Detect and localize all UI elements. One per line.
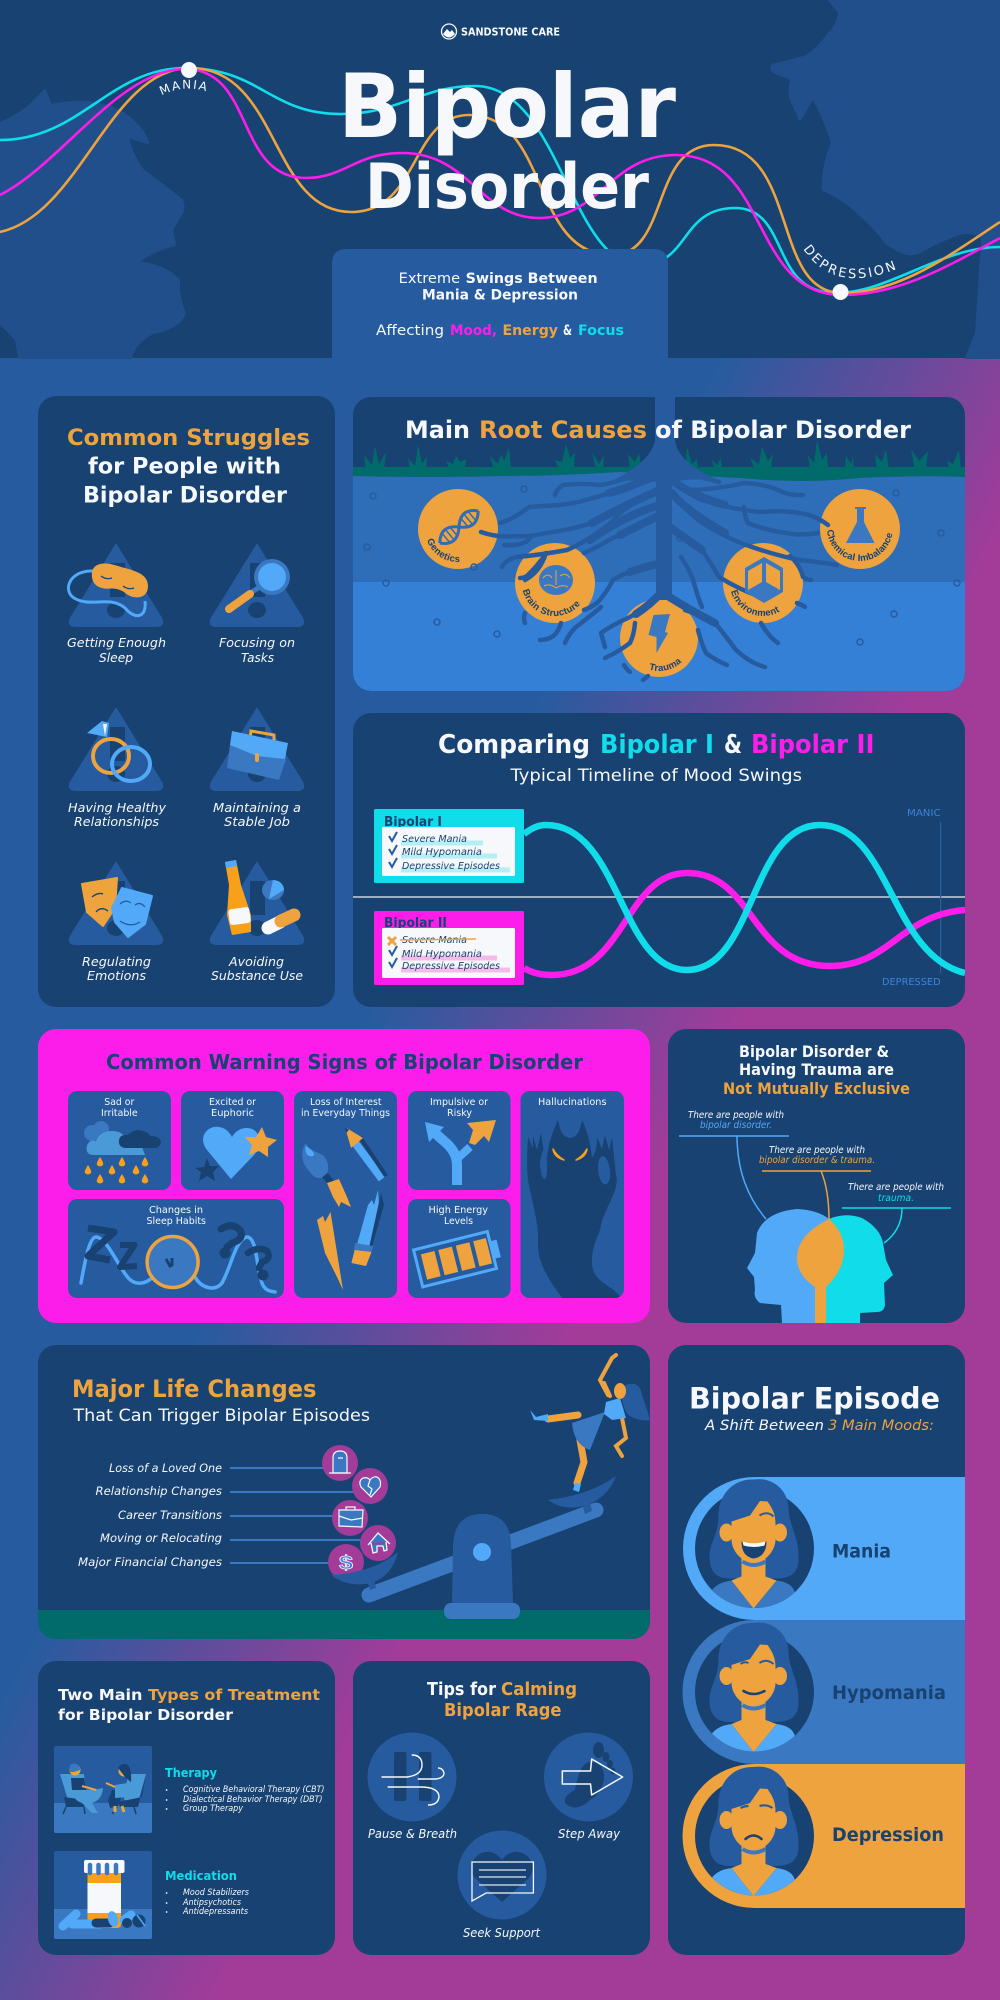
label: avoiding substance use: Avoiding xyxy=(228,955,284,969)
icon: tombstone xyxy=(322,1445,358,1481)
legend card: bipolar I: Depressive Episodes xyxy=(402,861,500,872)
label: maintaining a stable job xyxy=(213,801,301,829)
depression marker xyxy=(804,244,896,300)
illustration: medication bottle xyxy=(54,1851,152,1939)
heading: bipolar episode xyxy=(689,1382,940,1434)
subtitle box: Affecting xyxy=(376,323,444,339)
text: therapy: Cognitive Behavioral Therapy (CBT) xyxy=(183,1785,324,1795)
icon: theatre masks xyxy=(70,863,162,944)
illustration: woman on seesaw xyxy=(530,1355,650,1492)
callout: bipolar disorder: There are people with xyxy=(688,1110,784,1121)
legend card: bipolar I xyxy=(374,809,524,883)
panel: warning signs xyxy=(38,1029,650,1323)
soil pebbles xyxy=(364,486,960,645)
card: changes in sleep habits xyxy=(68,1199,284,1298)
heading: not mutually exclusive: Not Mutually Exclusive xyxy=(723,1079,910,1098)
heading: comparing: Bipolar I xyxy=(600,730,714,760)
panel: calming tips xyxy=(353,1661,650,1955)
card: high energy levels: High Energy xyxy=(428,1205,488,1216)
label: step away: Step Away xyxy=(558,1826,621,1841)
card: changes in sleep habits: Changes in xyxy=(149,1205,203,1216)
panel: major life changes xyxy=(38,1345,650,1639)
icon: seek support xyxy=(458,1830,546,1920)
callout: trauma: trauma. xyxy=(878,1193,914,1204)
label: avoiding substance use xyxy=(211,955,303,983)
label: getting enough sleep: Getting Enough xyxy=(67,636,166,650)
subtitle box xyxy=(332,249,668,358)
label: maintaining a stable job: Stable Job xyxy=(224,815,290,829)
heading: common struggles: Common Struggles xyxy=(67,426,310,451)
icon: brain and brain structure label: Brain Structure xyxy=(522,588,580,616)
list of life changes: Career Transitions xyxy=(118,1508,222,1522)
list of life changes: Relationship Changes xyxy=(96,1484,222,1498)
heading: treatment: Types of Treatment xyxy=(148,1686,321,1704)
heading: major life changes: That Can Trigger Bipolar Episodes xyxy=(72,1406,370,1426)
heading: common struggles: for People with xyxy=(88,454,281,480)
midline and scale: DEPRESSED xyxy=(882,977,941,988)
heading: treatment: for Bipolar Disorder xyxy=(58,1706,233,1724)
callout: bipolar disorder: bipolar disorder. xyxy=(700,1120,772,1131)
label: regulating emotions: Regulating xyxy=(82,955,151,969)
heading: comparing: Typical Timeline of Mood Swings xyxy=(509,766,802,786)
callout: bipolar disorder and trauma: There are people with xyxy=(769,1145,865,1156)
icon: dollar xyxy=(328,1544,364,1580)
legend card: bipolar I: Severe Mania xyxy=(402,834,467,845)
heading: root causes xyxy=(405,416,911,444)
mania marker: MANIA xyxy=(159,80,206,95)
icon: flask and chemical imbalance label xyxy=(827,507,892,562)
legend card: bipolar II: Bipolar II xyxy=(384,915,447,931)
callout: bipolar disorder xyxy=(679,1110,789,1219)
text: medication: Antipsychotics xyxy=(182,1898,242,1908)
label: seek support: Seek Support xyxy=(463,1925,541,1940)
icon: bottle and pills xyxy=(211,860,303,944)
label: avoiding substance use: Substance Use xyxy=(211,969,303,983)
text: therapy: Dialectical Behavior Therapy (DBT) xyxy=(183,1795,322,1805)
label: having healthy relationships: Having Healthy xyxy=(68,801,167,815)
band: hypomania xyxy=(682,1620,965,1764)
legend card: bipolar II xyxy=(374,911,524,985)
heading: warning signs: Common Warning Signs of Bipolar Disorder xyxy=(106,1050,583,1074)
text: medication: Antidepressants xyxy=(182,1907,249,1917)
title xyxy=(338,55,677,223)
heading: comparing: Bipolar II xyxy=(751,730,874,760)
label: focusing on tasks: Tasks xyxy=(241,651,274,665)
icon: lightning and trauma label: Trauma xyxy=(650,659,682,672)
panel: root causes xyxy=(353,397,965,691)
subtitle box: & xyxy=(563,323,572,339)
icon: lightning and trauma label xyxy=(648,614,682,672)
heading: major life changes: Major Life Changes xyxy=(72,1375,316,1403)
heading: bipolar episode: 3 Main Moods: xyxy=(828,1418,934,1434)
legend card: bipolar II: Mild Hypomania xyxy=(402,949,482,960)
icon: magnifying glass xyxy=(211,545,303,626)
heading: calming tips: Calming xyxy=(501,1680,577,1700)
heading: comparing: & xyxy=(724,730,742,760)
midline and scale: MANIC xyxy=(907,808,941,819)
callout: trauma: There are people with xyxy=(848,1182,944,1193)
legend card: bipolar I: Mild Hypomania xyxy=(402,847,482,858)
midline and scale xyxy=(353,808,965,988)
heading: comparing: Comparing xyxy=(438,730,590,760)
icon: broken heart xyxy=(352,1468,388,1504)
icon: house xyxy=(360,1525,396,1561)
panel: common struggles xyxy=(38,396,335,1007)
heading: bipolar episode: A Shift Between xyxy=(704,1418,824,1434)
callout: bipolar disorder and trauma: bipolar disorder & trauma. xyxy=(759,1155,875,1166)
band: hypomania: Hypomania xyxy=(832,1682,946,1704)
roots xyxy=(481,397,837,680)
icon: briefcase xyxy=(332,1500,368,1536)
card: sad or irritable: Sad or xyxy=(104,1097,135,1108)
heading: bipolar episode: Bipolar Episode xyxy=(689,1382,940,1416)
callout: trauma xyxy=(842,1182,951,1243)
list of life changes xyxy=(78,1461,363,1569)
illustration: therapy session xyxy=(54,1746,152,1833)
mood wave lines xyxy=(0,68,1000,295)
right head silhouette xyxy=(771,0,1000,358)
label: getting enough sleep: Sleep xyxy=(99,651,133,665)
list of life changes: Moving or Relocating xyxy=(100,1531,222,1545)
card: changes in sleep habits: Sleep Habits xyxy=(146,1216,206,1227)
callout: bipolar disorder and trauma xyxy=(759,1145,875,1220)
label: focusing on tasks: Focusing on xyxy=(219,636,295,650)
root circles xyxy=(418,489,900,677)
subtitle box: Energy xyxy=(502,323,559,339)
card: loss of interest: Loss of Interest xyxy=(310,1097,382,1108)
text: therapy: Therapy xyxy=(165,1765,217,1780)
subtitle box: Mania & Depression xyxy=(422,288,578,304)
heading: calming tips: Bipolar Rage xyxy=(444,1701,562,1721)
list of life changes: Major Financial Changes xyxy=(78,1555,222,1569)
icon: DNA and genetics label xyxy=(428,509,480,562)
subtitle box: Focus xyxy=(578,323,624,339)
heading: common struggles xyxy=(67,426,310,508)
subtitle box: Extreme xyxy=(399,271,460,287)
card: sad or irritable: Irritable xyxy=(101,1108,138,1119)
card: high energy levels xyxy=(408,1199,510,1298)
card: impulsive or risky: Impulsive or xyxy=(430,1097,489,1108)
depression marker: DEPRESSION xyxy=(804,244,896,278)
subtitle box: Mood, xyxy=(450,323,497,339)
card: excited or euphoric xyxy=(181,1091,284,1190)
text: therapy xyxy=(165,1765,324,1814)
label: getting enough sleep xyxy=(67,636,166,665)
label: focusing on tasks xyxy=(219,636,295,665)
mania marker xyxy=(159,62,206,95)
card: excited or euphoric: Excited or xyxy=(209,1097,257,1108)
label: having healthy relationships: Relationships xyxy=(74,815,159,829)
band: mania: Mania xyxy=(832,1540,891,1562)
label: regulating emotions: Emotions xyxy=(87,969,146,983)
text: medication: Medication xyxy=(165,1868,237,1883)
heading: treatment xyxy=(58,1686,321,1724)
legend card: bipolar I: Bipolar I xyxy=(384,814,442,830)
heading: not mutually exclusive xyxy=(723,1042,910,1098)
legend card: bipolar II: Severe Mania xyxy=(402,935,467,946)
icon: rings xyxy=(70,709,162,790)
panel: treatment types xyxy=(38,1661,335,1955)
icon: cube and environment label: Environment xyxy=(731,590,780,616)
heading: major life changes xyxy=(72,1375,370,1426)
icon: pause and breath xyxy=(368,1732,456,1822)
icon: brain and brain structure label xyxy=(522,565,580,616)
two heads illustration xyxy=(747,1209,893,1323)
icon: sleep mask xyxy=(68,545,162,626)
subtitle box: Swings Between xyxy=(466,271,598,287)
card: loss of interest: in Everyday Things xyxy=(301,1108,390,1119)
heading: common struggles: Bipolar Disorder xyxy=(83,484,287,508)
band: mania xyxy=(683,1477,965,1620)
mood swing curves xyxy=(524,825,965,975)
panel: trauma not mutually exclusive xyxy=(668,1029,965,1323)
heading: treatment: Two Main xyxy=(58,1686,142,1704)
heading: root causes: Main xyxy=(405,416,470,444)
list of life changes: Loss of a Loved One xyxy=(109,1461,222,1475)
header banner xyxy=(0,0,1000,359)
icon: DNA and genetics label: Genetics xyxy=(428,538,460,562)
icon: step away xyxy=(544,1732,633,1822)
heading: comparing xyxy=(438,730,874,786)
heading: root causes: Root Causes xyxy=(479,416,647,444)
heading: not mutually exclusive: Bipolar Disorder & xyxy=(739,1042,889,1061)
heading: not mutually exclusive: Having Trauma are xyxy=(739,1060,894,1079)
text: medication: Mood Stabilizers xyxy=(183,1888,250,1898)
card: excited or euphoric: Euphoric xyxy=(211,1108,254,1119)
title: Disorder xyxy=(365,150,649,223)
heading: root causes: of Bipolar Disorder xyxy=(655,416,911,444)
text: medication xyxy=(165,1868,250,1917)
label: pause and breath: Pause & Breath xyxy=(368,1826,457,1841)
title: Bipolar xyxy=(338,55,677,158)
icon: cube and environment label xyxy=(731,557,783,616)
label: maintaining a stable job: Maintaining a xyxy=(213,801,301,815)
icon: flask and chemical imbalance label: Chemical Imbalance xyxy=(827,530,892,562)
label: regulating emotions xyxy=(82,955,151,983)
card: loss of interest xyxy=(294,1091,397,1298)
card: sad or irritable xyxy=(68,1091,171,1190)
card: hallucinations: Hallucinations xyxy=(538,1097,606,1108)
card: hallucinations xyxy=(520,1091,624,1300)
panel: comparing bipolar I and II xyxy=(353,713,965,1007)
heading: calming tips xyxy=(427,1680,577,1721)
band: depression xyxy=(682,1764,965,1908)
heading: calming tips: Tips for xyxy=(427,1680,496,1700)
text: therapy: Group Therapy xyxy=(183,1804,244,1814)
icon: dollar: $ xyxy=(339,1553,354,1574)
logo: SANDSTONE CARE xyxy=(461,26,560,38)
icon: briefcase xyxy=(211,709,303,790)
legend card: bipolar II: Depressive Episodes xyxy=(402,961,500,972)
card: impulsive or risky: Risky xyxy=(447,1108,472,1119)
seesaw xyxy=(331,1476,616,1619)
band: depression: Depression xyxy=(832,1824,944,1846)
logo xyxy=(442,24,560,39)
left head silhouette xyxy=(0,90,185,358)
card: high energy levels: Levels xyxy=(444,1216,473,1227)
panel: bipolar episode xyxy=(668,1345,965,1955)
label: having healthy relationships xyxy=(68,801,167,829)
card: impulsive or risky xyxy=(408,1091,510,1190)
